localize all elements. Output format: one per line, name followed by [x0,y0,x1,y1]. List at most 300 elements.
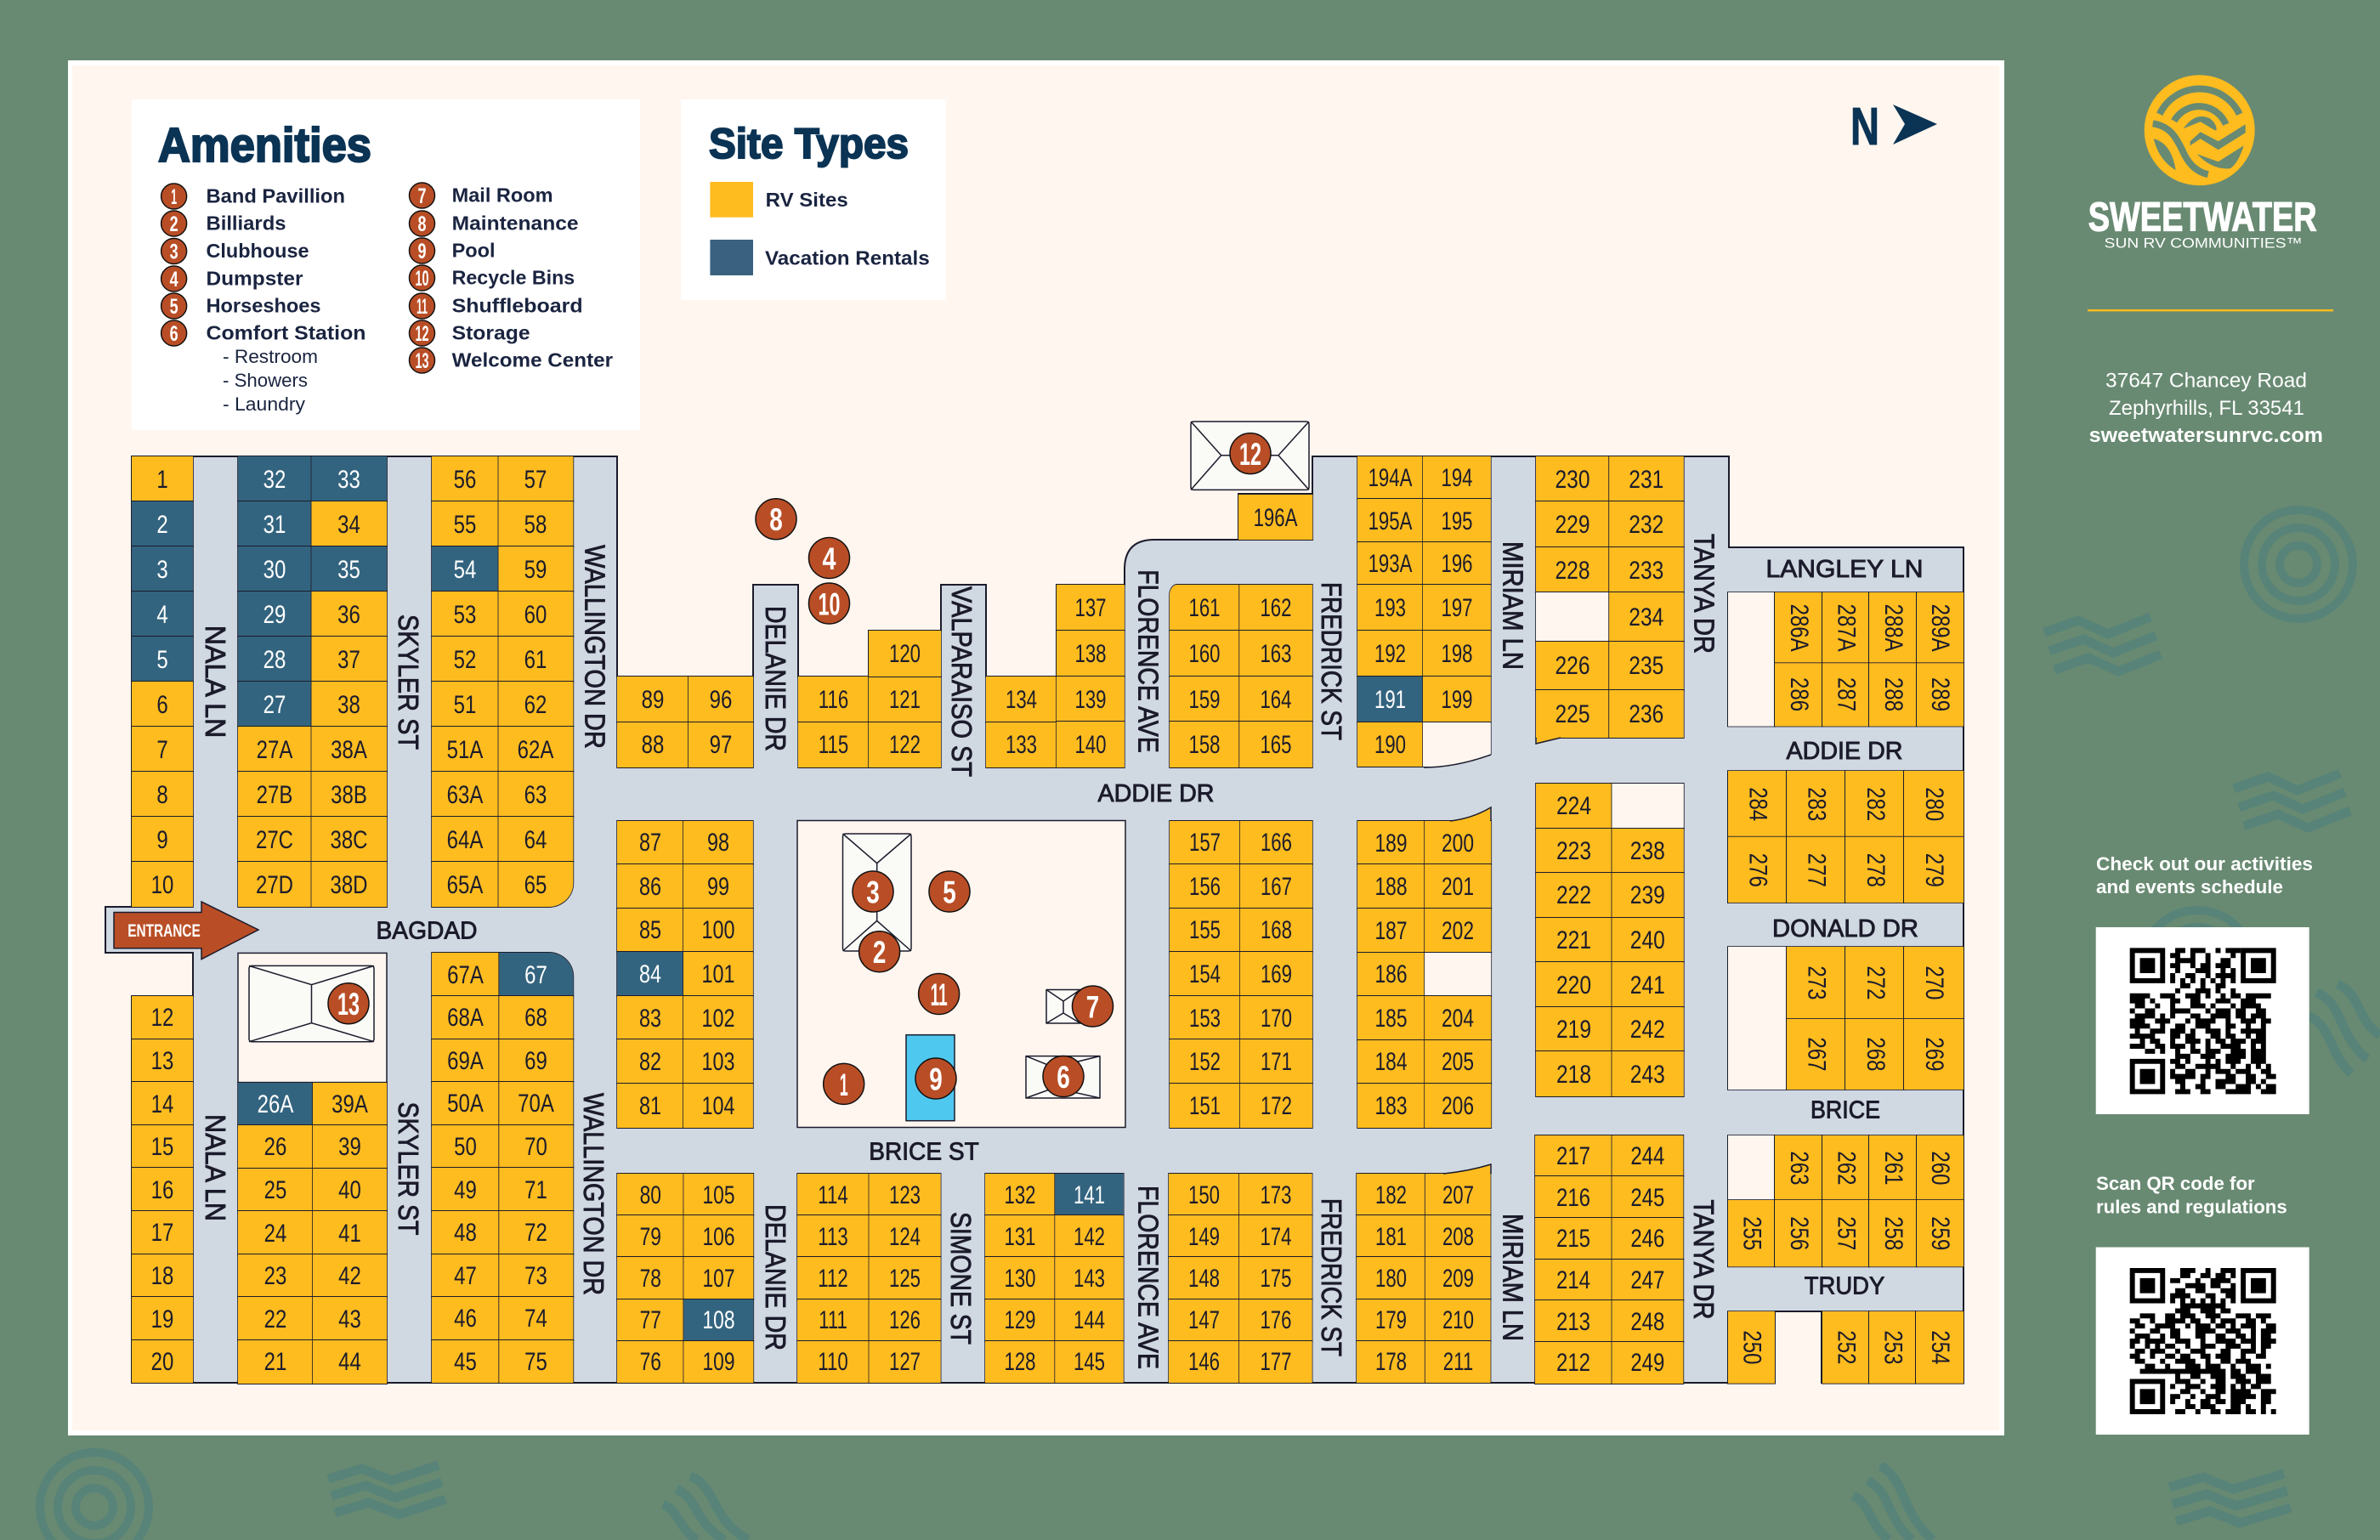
lot block: sites 45 to 75: 50A [447,1090,484,1118]
rules caption: Scan QR code for [2096,1173,2255,1194]
lot block: sites 81 to 104: 81 [639,1092,661,1120]
amenity list: column two: 9 [418,240,427,263]
lot block: sites 1 to 10: 2 [156,511,168,539]
lot: site 250: 250 [1737,1330,1766,1364]
lot block: sites 81 to 104: 82 [639,1048,661,1076]
lot block: sites 225 to 236: 231 [1629,466,1663,494]
road labels: ADDIE DR [1787,738,1902,765]
amenity list: column one: 2 [170,212,178,236]
lot block: sites 27 to 38D: 38A [331,736,367,764]
lot block: sites 133 to 134 [985,677,1056,768]
lot block: sites 21 to 44: 41 [338,1220,361,1248]
entrance arrow [114,902,258,960]
lot block: sites 1 to 10: 7 [156,736,168,764]
lot block: sites 225 to 236: 230 [1555,466,1590,494]
lot block: sites 81 to 104 [616,820,754,1129]
lot block: sites 151 to 172: 154 [1189,960,1221,988]
lot block: sites 12 to 20: 16 [151,1176,173,1204]
lot block: sites 27 to 38D: 28 [264,646,286,674]
lot block: sites 190 to 199 [1357,456,1492,767]
lot block: sites 45 to 75: 69A [447,1047,484,1075]
lot block: sites 51 to 65: 54 [454,556,476,584]
lot block: sites 110 to 127: 125 [889,1265,921,1293]
lot block: sites 81 to 104: 99 [707,873,729,901]
lot block: sites 218 to 243: 223 [1556,837,1591,865]
lot block: sites 51 to 65: 64A [447,826,483,854]
lot block: sites 183 to 206: 200 [1442,829,1474,858]
lot block: sites 178 to 211: 207 [1442,1181,1474,1209]
amenity list: column one: 1 [171,185,177,209]
divider line [2088,309,2333,311]
amenity list: column two: Mail Room [452,184,553,207]
amenity markers on map: 11 [931,977,948,1012]
lot block: sites 51 to 65: 64 [524,826,547,854]
lot block: sites 12 to 20: 14 [151,1090,173,1118]
lot block: sites 158 to 165: 161 [1188,594,1221,622]
lot block: sites 110 to 127: 127 [889,1348,921,1376]
curved lot edges [1424,736,1561,1175]
amenity list: column two: 10 [415,267,428,291]
lot block: sites 1 to 10: 9 [156,826,168,854]
lot block: sites 76 to 109: 77 [639,1306,660,1334]
lot block: sites 51 to 65: 65A [447,871,483,899]
amenity list: column two: Pool [452,240,496,262]
building: clubhouse [843,834,911,951]
lot block: sites 12 to 20: 19 [151,1305,173,1333]
lot block: sites 183 to 206: 206 [1442,1092,1474,1120]
amenity list: column one: - Restroom [223,346,318,367]
amenity markers on map [756,499,1114,1104]
road labels: BAGDAD [376,918,478,945]
activities caption: Check out our activities [2096,853,2313,875]
lot block: sites 81 to 104: 103 [701,1048,735,1076]
building: welcome center [249,965,374,1042]
lot block: sites 27 to 38D: 33 [337,466,360,494]
lot block: sites 218 to 243: 238 [1630,837,1665,865]
lot block: sites 286 to 289A: 289 [1926,677,1954,711]
lot block: sites 225 to 236: 226 [1555,652,1590,680]
lot block: sites 21 to 44: 39A [332,1090,368,1118]
building: mail room [1046,989,1084,1023]
road labels: MIRIAM LN [1498,541,1529,670]
lot block: sites 110 to 127 [796,1173,942,1383]
lot block: sites 128 to 145: 131 [1005,1223,1036,1251]
lot block: sites 51 to 65: 57 [524,466,547,494]
lot block: sites 110 to 127: 126 [889,1306,921,1334]
lot block: sites 276 to 284: 279 [1920,852,1948,886]
lot block: sites 45 to 75: 49 [454,1176,477,1204]
lot block: sites 178 to 211: 179 [1375,1306,1407,1334]
lot block: sites 255 to 263: 261 [1879,1151,1907,1185]
lot block: sites 27 to 38D: 31 [264,511,286,539]
amenity list: column two: Maintenance [452,212,579,235]
address block [2089,370,2323,447]
lot block: sites 183 to 206 [1357,820,1493,1129]
lot block: sites 51 to 65: 59 [524,556,547,584]
lot block: sites 88 to 97 [616,677,754,768]
lot block: sites 21 to 44: 43 [338,1305,361,1333]
lot block: sites 45 to 75: 70A [518,1090,554,1118]
lot block: sites 225 to 236: 236 [1629,700,1663,728]
lot block: sites 1 to 10: 4 [156,601,168,629]
lot block: sites 88 to 97: 96 [710,686,732,714]
lot block: sites 146 to 177: 173 [1260,1181,1292,1209]
lot block: sites 115 to 122: 121 [889,686,921,714]
logo: sweetwater sun and waves [2145,75,2255,185]
lot block: sites 45 to 75: 70 [524,1133,547,1161]
lot block: sites 218 to 243: 219 [1556,1016,1591,1044]
road labels: TRUDY [1805,1273,1884,1300]
lot block: sites 190 to 199: 194A [1368,464,1412,492]
lot block: sites 255 to 263: 262 [1832,1151,1860,1185]
pool [906,1035,955,1121]
lot block: sites 183 to 206: 186 [1374,960,1408,988]
lot block: sites 76 to 109: 105 [702,1181,734,1209]
road labels: BRICE ST [869,1139,979,1166]
lot block: sites 45 to 75: 67 [524,961,547,989]
lot block: sites 190 to 199: 199 [1441,686,1473,714]
lot block: sites 252 to 254: 254 [1926,1330,1954,1364]
lot block: sites 151 to 172 [1169,820,1313,1129]
lot block: sites 45 to 75: 50 [454,1133,477,1161]
lot block: sites 21 to 44 [237,1082,388,1384]
lot block: sites 276 to 284: 283 [1803,786,1831,821]
lot block: sites 276 to 284: 276 [1744,852,1772,886]
lot block: sites 12 to 20: 13 [151,1047,173,1075]
lot block: sites 76 to 109: 79 [639,1223,660,1251]
marker 13: 13 [337,987,360,1022]
lot block: sites 27 to 38D: 27C [256,826,293,854]
lot block: sites 267 to 273: 269 [1920,1038,1948,1072]
lot block: sites 27 to 38D: 32 [264,466,286,494]
lot block: sites 225 to 236: 225 [1555,700,1590,728]
lot block: sites 21 to 44: 26 [264,1133,286,1161]
lot block: sites 21 to 44: 23 [264,1262,286,1290]
heading: amenities: Amenities [158,118,371,173]
entrance arrow: ENTRANCE [128,921,201,941]
lot block: sites 252 to 254: 252 [1832,1330,1860,1364]
lot block: sites 81 to 104: 101 [701,960,735,988]
amenity markers on map: 10 [818,586,840,622]
road labels: NALA LN [200,626,231,738]
lot block: sites 128 to 145: 141 [1074,1181,1105,1209]
lot block: sites 21 to 44: 39 [338,1133,361,1161]
lot block: sites 158 to 165: 158 [1188,731,1221,759]
lot block: sites 286 to 289A: 288A [1879,603,1907,652]
lot block: sites 51 to 65: 55 [454,511,476,539]
amenity list: column two: 11 [416,295,428,319]
lot block: sites 110 to 127: 114 [818,1181,848,1209]
lot block: sites 178 to 211: 209 [1442,1265,1474,1293]
lot block: sites 12 to 20: 17 [151,1219,173,1247]
lot block: sites 137 to 140: 137 [1074,594,1107,622]
lot block: sites 45 to 75: 48 [454,1219,477,1247]
amenity list: column two: 13 [415,349,428,373]
lot block: sites 190 to 199: 193 [1374,594,1406,622]
lot block: sites 252 to 254 [1822,1311,1964,1384]
lot block: sites 151 to 172: 166 [1261,829,1292,857]
lot block: sites 146 to 177: 175 [1260,1265,1292,1293]
lot block: sites 225 to 236: 234 [1629,603,1663,631]
road labels: FREDRICK ST [1316,1198,1347,1356]
lot block: sites 45 to 75: 74 [524,1305,547,1333]
lot block: sites 27 to 38D: 38D [330,871,368,899]
lot block: sites 178 to 211: 211 [1443,1348,1473,1376]
lot block: sites 128 to 145: 129 [1005,1306,1036,1334]
QR code: rules and regulations [2096,1248,2309,1435]
lot block: sites 76 to 109: 76 [639,1348,660,1376]
amenity list: column two: Storage [452,322,530,344]
lot block: sites 1 to 10: 5 [156,646,168,674]
lot block: sites 190 to 199: 195A [1368,507,1412,535]
lot block: sites 255 to 263: 255 [1737,1216,1766,1250]
lot block: sites 178 to 211: 178 [1375,1348,1407,1376]
lot block: sites 1 to 10: 3 [156,556,168,584]
lot block: sites 218 to 243: 221 [1556,926,1591,954]
amenity list: column one: Band Pavillion [206,185,345,207]
amenity list: column one: 5 [170,295,178,319]
road labels: WALLINGTON DR [580,545,611,749]
amenity list: column one: 6 [170,322,178,346]
lot block: sites 21 to 44: 21 [264,1348,286,1376]
road labels: MIRIAM LN [1498,1214,1529,1341]
amenity list: column one: Dumpster [206,268,303,290]
lot block: sites 81 to 104: 86 [639,873,661,901]
lot block: sites 110 to 127: 123 [889,1181,921,1209]
lot block: sites 27 to 38D: 27B [257,781,292,809]
lot block: sites 110 to 127: 110 [818,1348,848,1376]
lot block: sites 76 to 109 [616,1173,755,1383]
amenity list: column one: 3 [170,240,178,263]
lot block: sites 76 to 109: 107 [702,1265,734,1293]
lot block: sites 81 to 104: 102 [701,1005,735,1033]
lot block: sites 128 to 145 [984,1173,1125,1383]
lot block: sites 255 to 263: 257 [1832,1216,1860,1250]
lot block: sites 128 to 145: 128 [1005,1348,1036,1376]
rules caption: rules and regulations [2096,1196,2287,1217]
lot block: sites 51 to 65: 62A [518,736,553,764]
lot block: sites 27 to 38D: 38C [330,826,368,854]
lot block: sites 267 to 273: 268 [1862,1038,1890,1072]
lot block: sites 178 to 211: 181 [1375,1223,1407,1251]
lot block: sites 51 to 65: 51A [447,736,483,764]
marker 13 [328,983,369,1024]
lot block: sites 115 to 122 [797,676,942,768]
lot block: sites 255 to 263: 256 [1785,1216,1813,1250]
map panel [68,60,2004,1435]
lot block: sites 45 to 75: 73 [524,1262,547,1290]
lot block: sites 151 to 172: 155 [1189,916,1221,944]
lot block: sites 212 to 249: 249 [1630,1349,1664,1377]
lot block: sites 137 to 140: 138 [1074,640,1107,668]
lot block: sites 212 to 249: 247 [1630,1266,1664,1294]
amenity list: column two: 12 [415,322,428,346]
lot block: sites 183 to 206: 205 [1442,1048,1474,1076]
background watermark pattern [40,510,2380,1540]
lot block: sites 158 to 165: 165 [1260,731,1292,759]
lot block: sites 1 to 10: 6 [156,691,168,719]
lot block: sites 218 to 243: 241 [1630,971,1665,999]
lot block: sites 183 to 206: 185 [1374,1005,1408,1033]
lot block: sites 252 to 254: 253 [1879,1330,1907,1364]
lot block: sites 286 to 289A: 287 [1832,677,1860,711]
brand name: SWEETWATER [2088,195,2317,241]
lot block: sites 51 to 65: 62 [524,691,547,719]
lot block: sites 225 to 236: 235 [1629,652,1663,680]
lot block: sites 286 to 289A: 287A [1832,603,1860,652]
amenity list: column two: 8 [418,212,427,236]
lot block: sites 286 to 289A: 286 [1785,677,1813,711]
road labels: DELANIE DR [760,606,791,751]
amenity list: column one: 4 [170,268,178,292]
road labels: SIMONE ST [945,1212,977,1345]
lot block: sites 21 to 44: 22 [264,1305,286,1333]
lot block: sites 218 to 243: 222 [1556,881,1591,909]
amenity markers on map: 1 [840,1067,848,1102]
lot block: sites 45 to 75: 67A [447,961,484,989]
amenity list: column two: 7 [418,184,427,208]
lot block: sites 76 to 109: 109 [702,1348,734,1376]
lot block: sites 151 to 172: 153 [1189,1005,1221,1033]
lot block: sites 212 to 249: 214 [1556,1266,1590,1294]
lot block: sites 151 to 172: 157 [1189,829,1221,857]
lot block: sites 218 to 243 [1535,783,1685,1097]
road labels: DONALD DR [1772,915,1918,943]
lot block: sites 225 to 236 [1535,456,1685,739]
lot block: sites 128 to 145: 142 [1074,1223,1105,1251]
lot block: sites 276 to 284: 278 [1862,852,1890,886]
road labels: WALLINGTON DR [578,1093,609,1295]
lot block: sites 276 to 284: 284 [1744,786,1772,821]
lot block: sites 51 to 65: 56 [454,466,476,494]
road labels: FLORENCE AVE [1132,1186,1164,1369]
lot block: sites 218 to 243: 240 [1630,926,1665,954]
amenity markers on map: 3 [866,875,880,909]
lot block: sites 51 to 65: 61 [524,646,547,674]
lot block: sites 158 to 165: 163 [1260,640,1292,668]
lot block: sites 146 to 177: 148 [1188,1265,1220,1293]
lot block: sites 27 to 38D: 27 [264,691,286,719]
lot block: sites 1 to 10: 1 [156,466,168,494]
lot block: sites 146 to 177: 149 [1188,1223,1220,1251]
lot block: sites 21 to 44: 40 [338,1176,361,1204]
lot block: sites 146 to 177 [1168,1173,1312,1383]
lot block: sites 218 to 243: 218 [1556,1061,1591,1089]
lot block: sites 137 to 140: 139 [1074,685,1107,714]
amenity markers on map: 4 [823,541,836,576]
amenity markers on map: 9 [929,1062,943,1096]
amenity list: column one: - Showers [223,370,308,391]
amenity markers on map: 5 [943,875,956,909]
lot block: sites 110 to 127: 113 [818,1223,848,1251]
lot block: sites 1 to 10: 10 [151,871,173,899]
lot block: sites 218 to 243: 243 [1630,1061,1665,1089]
road labels: TANYA DR [1689,534,1720,654]
lot block: sites 286 to 289A: 289A [1926,603,1954,652]
lot block: sites 225 to 236: 229 [1555,511,1590,539]
lot block: sites 1 to 10: 8 [156,781,168,809]
lot block: sites 190 to 199: 198 [1441,640,1473,668]
lot block: sites 212 to 249: 215 [1556,1225,1590,1253]
building: comfort station [1026,1056,1100,1098]
address block: 37647 Chancey Road [2105,370,2307,393]
lot block: sites 267 to 273: 267 [1803,1038,1831,1072]
lot block: sites 212 to 249: 244 [1630,1142,1664,1170]
lot block: sites 183 to 206: 188 [1374,873,1408,901]
lot block: sites 115 to 122: 122 [889,731,921,759]
lot block: sites 45 to 75: 46 [454,1305,477,1333]
lot block: sites 81 to 104: 104 [701,1092,735,1120]
amenity markers on map: 8 [769,502,783,537]
lot block: sites 27 to 38D: 27D [256,871,293,899]
lot block: sites 190 to 199: 193A [1368,550,1412,578]
lot block: sites 190 to 199: 190 [1374,731,1406,759]
lot block: sites 128 to 145: 130 [1005,1265,1036,1293]
lot block: sites 76 to 109: 78 [639,1265,660,1293]
road labels: ADDIE DR [1098,780,1214,807]
amenity list: column one: Horseshoes [206,295,321,317]
lot block: sites 190 to 199: 192 [1374,640,1406,668]
lot block: sites 27 to 38D: 30 [264,556,286,584]
legend swatch: vacation rentals [710,240,930,275]
activities caption [2096,853,2313,897]
lot block: sites 151 to 172: 171 [1261,1048,1292,1076]
brand name [2088,195,2317,252]
amenity markers on map: 2 [873,935,886,970]
amenity list: column one: Clubhouse [206,240,309,262]
road labels: SKYLER ST [393,614,424,750]
address block: sweetwatersunrvc.com [2089,424,2323,447]
lot block: sites 212 to 249: 246 [1630,1225,1664,1253]
amenity list: column two [410,183,613,373]
lot block: sites 76 to 109: 106 [702,1223,734,1251]
lot block: sites 27 to 38D: 38B [331,781,367,809]
plot: central amenities park [797,821,1125,1127]
lot block: sites 45 to 75: 68 [524,1004,547,1032]
lot block: sites 51 to 65: 58 [524,511,547,539]
lot block: sites 158 to 165: 164 [1260,685,1292,714]
lot block: sites 190 to 199: 197 [1441,594,1473,622]
road labels: NALA LN [200,1114,231,1221]
lot block: sites 218 to 243: 239 [1630,881,1665,909]
lot block: sites 51 to 65: 60 [524,601,547,629]
lot block: sites 158 to 165: 162 [1260,594,1292,622]
lot block: sites 21 to 44: 26A [258,1090,293,1118]
road labels: LANGLEY LN [1766,556,1923,583]
lot block: sites 151 to 172: 167 [1261,873,1292,901]
lot block: sites 255 to 263: 263 [1785,1151,1813,1185]
lot block: sites 21 to 44: 42 [338,1262,361,1290]
lot block: sites 225 to 236: 232 [1629,511,1663,539]
lot: site 120: 120 [889,640,921,668]
road labels: DELANIE DR [760,1204,791,1350]
lot block: sites 218 to 243: 224 [1556,792,1591,820]
lot block: sites 1 to 10 [132,456,194,908]
amenity list: column two: Recycle Bins [452,267,575,289]
lot block: sites 45 to 75: 71 [524,1176,547,1204]
lot block: sites 81 to 104: 87 [639,829,661,857]
lot block: sites 27 to 38D: 38 [337,691,360,719]
lot block: sites 183 to 206: 204 [1442,1005,1474,1033]
lot block: sites 115 to 122: 115 [819,731,848,759]
lot block: sites 45 to 75: 75 [524,1348,547,1376]
lot block: sites 183 to 206: 187 [1374,917,1408,945]
road network [105,456,1964,1383]
lot block: sites 45 to 75: 45 [454,1348,477,1376]
lot block: sites 183 to 206: 183 [1374,1092,1408,1120]
lot block: sites 51 to 65: 63 [524,781,547,809]
road labels [200,534,1923,1369]
